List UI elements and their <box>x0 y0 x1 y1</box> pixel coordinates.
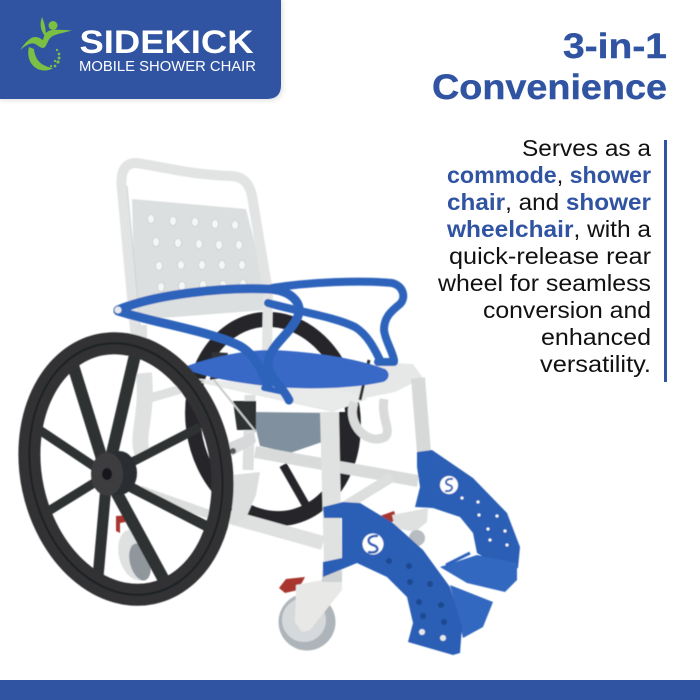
heading <box>432 27 667 107</box>
near footplate <box>450 585 493 638</box>
icon: brand logo <box>20 17 72 70</box>
description text: commode, shower <box>447 162 651 188</box>
description text: wheelchair , with a <box>446 216 651 242</box>
commode bucket <box>252 412 335 453</box>
description text: versatility. <box>540 351 651 377</box>
footer bar <box>0 680 700 700</box>
backrest <box>122 163 268 352</box>
accent line <box>664 140 667 382</box>
frame crossbars <box>230 395 418 543</box>
front right leg <box>320 412 342 565</box>
description text: wheel for seamless <box>437 270 651 296</box>
description text: conversion and <box>483 297 651 323</box>
brand name: SIDEKICK <box>80 24 254 60</box>
description text: enhanced <box>541 324 651 350</box>
armrest pivot <box>114 306 122 314</box>
description text <box>437 135 651 377</box>
rear axle bracket <box>210 352 260 525</box>
far caster <box>380 508 428 546</box>
far footrest plate <box>415 450 520 592</box>
shower chair illustration <box>7 163 520 655</box>
far rear wheel <box>180 309 366 529</box>
description text: quick-release rear <box>449 243 651 269</box>
heading: 3-in-1 <box>563 27 667 66</box>
rear caster behind wheel <box>113 515 157 584</box>
seat <box>182 350 389 388</box>
description text: chair, and shower <box>447 189 651 215</box>
near armrest <box>118 289 299 400</box>
large rear wheel <box>7 325 245 613</box>
header banner <box>0 0 283 101</box>
far leg and hose <box>352 360 424 452</box>
near caster <box>278 570 342 650</box>
seat frame <box>193 362 423 412</box>
description text: Serves as a <box>522 135 651 161</box>
far armrest <box>268 282 403 362</box>
near footrest plate <box>323 502 462 655</box>
product name: MOBILE SHOWER CHAIR <box>79 59 256 75</box>
rear leg behind wheel <box>140 325 225 520</box>
heading: Convenience <box>432 68 667 107</box>
